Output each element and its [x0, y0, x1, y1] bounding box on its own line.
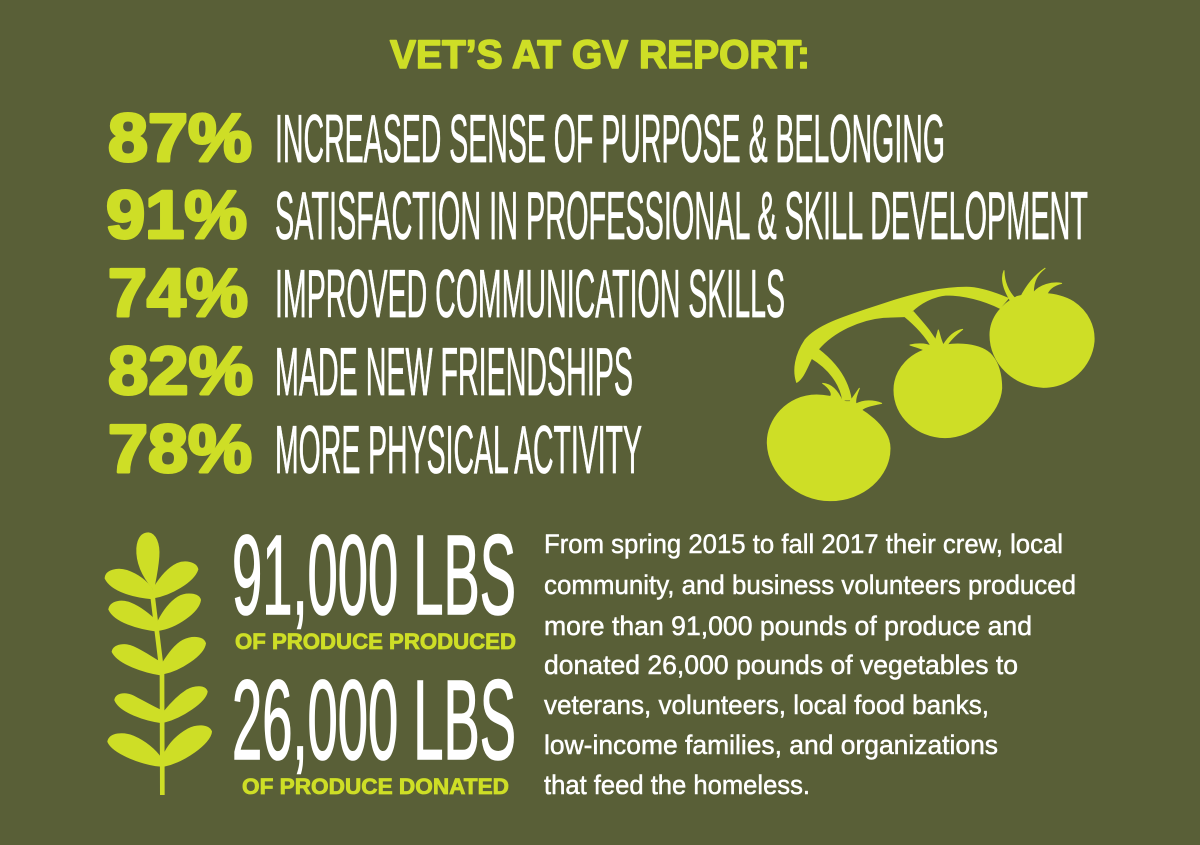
stat: 82% new friendships — [108, 333, 633, 410]
stat: 91% professional and skill development: 91% — [106, 177, 247, 253]
text: 26,000 LBS — [232, 657, 516, 783]
body paragraph: that feed the homeless. — [544, 770, 810, 800]
statistics list: MADE NEW FRIENDSHIPS — [275, 334, 633, 410]
body paragraph: community, and business volunteers produced — [544, 570, 1076, 600]
body paragraph: veterans, volunteers, local food banks, — [544, 690, 989, 720]
body paragraph: low-income families, and organizations — [544, 730, 998, 760]
statistics list — [106, 100, 1088, 488]
stat: 87% purpose and belonging — [108, 100, 945, 177]
stat: 91,000 lbs produced — [232, 512, 516, 654]
body paragraph: donated 26,000 pounds of vegetables to — [544, 650, 1018, 680]
text: 91,000 LBS — [232, 512, 516, 638]
body paragraph: more than 91,000 pounds of produce and — [544, 611, 1032, 641]
stat: 74% communication skills — [108, 255, 785, 332]
stat: 78% physical activity: 78% — [108, 411, 252, 487]
body paragraph — [544, 529, 1076, 800]
statistics list: MORE PHYSICAL ACTIVITY — [275, 412, 642, 488]
stat: 82% new friendships: 82% — [108, 333, 253, 409]
body paragraph: From spring 2015 to fall 2017 their crew, local — [544, 529, 1063, 559]
stat: 91,000 lbs produced: OF PRODUCE PRODUCED — [235, 629, 516, 654]
icon: leafy sprig — [106, 533, 211, 795]
stat: 26,000 lbs donated: OF PRODUCE DONATED — [242, 774, 509, 799]
stat: 78% physical activity — [108, 411, 642, 488]
stat: 87% purpose and belonging: 87% — [108, 100, 252, 176]
stat: 26,000 lbs donated — [232, 657, 516, 799]
stat: 74% communication skills: 74% — [108, 255, 248, 331]
title: VET’S AT GV REPORT: — [390, 33, 810, 77]
icon: tomato vine — [767, 268, 1094, 501]
